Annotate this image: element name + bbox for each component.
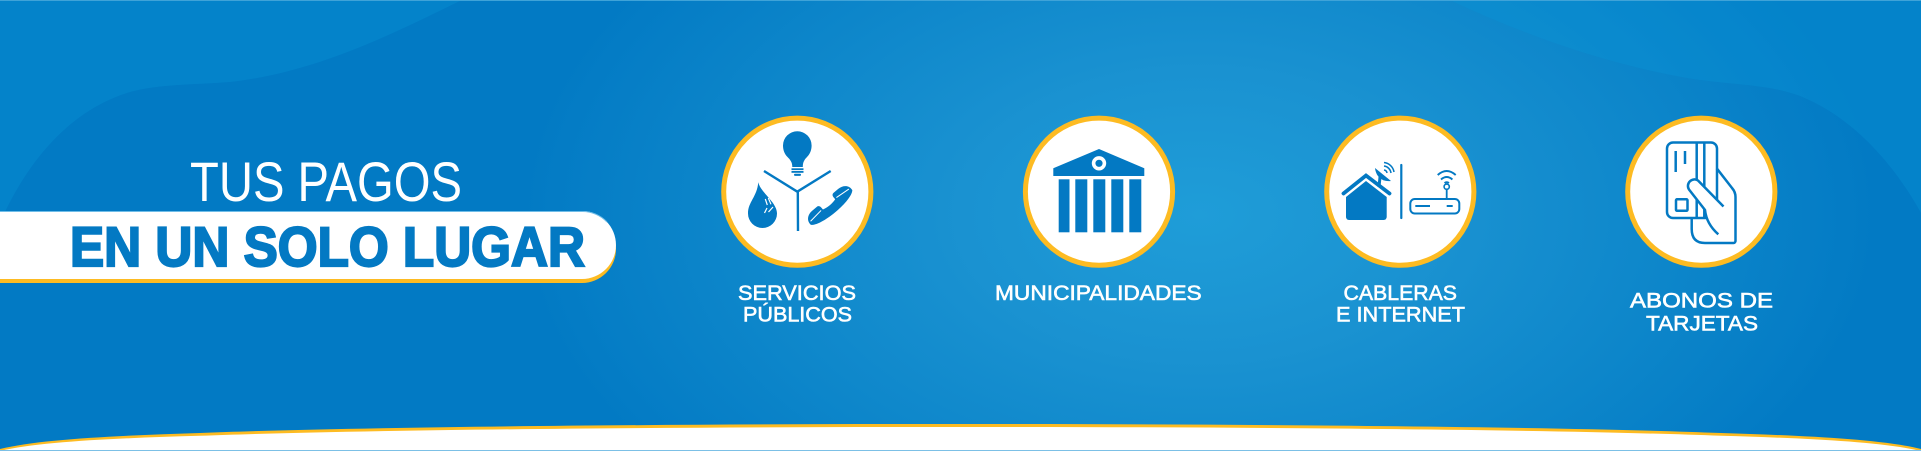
banner: en un solo lugar: EN UN SOLO LUGAR	[70, 215, 585, 278]
item: municipalidades	[995, 118, 1202, 305]
bottom curve	[0, 424, 1921, 451]
label: servicios publicos	[738, 280, 856, 327]
label: abonos de tarjetas	[1630, 287, 1773, 336]
icon: light bulb	[783, 131, 812, 176]
icon: telephone	[804, 182, 856, 229]
label: cableras e internet: E INTERNET	[1336, 302, 1465, 327]
icon: services circle	[724, 118, 871, 265]
icon: cable and internet circle	[1327, 118, 1474, 265]
divider	[1400, 165, 1402, 218]
label: servicios publicos: SERVICIOS	[738, 280, 856, 305]
icon: house with satellite dish	[1344, 162, 1394, 220]
label: servicios publicos: PÚBLICOS	[743, 302, 852, 327]
label: municipalidades: MUNICIPALIDADES	[995, 280, 1202, 305]
heading: tus pagos: TUS PAGOS	[190, 150, 462, 213]
label: abonos de tarjetas: TARJETAS	[1646, 311, 1758, 336]
label: cableras e internet	[1336, 280, 1465, 327]
icon: water drop	[748, 182, 777, 228]
icon: wifi router	[1410, 171, 1459, 214]
item: cableras e internet	[1327, 118, 1474, 327]
icon: municipal building	[1025, 118, 1173, 265]
label: cableras e internet: CABLERAS	[1344, 280, 1457, 305]
item: abonos de tarjetas	[1628, 118, 1775, 336]
icon: hand holding card	[1628, 118, 1775, 265]
icon: dividing lines	[764, 171, 831, 231]
item: servicios publicos	[724, 118, 871, 327]
label: abonos de tarjetas: ABONOS DE	[1630, 287, 1773, 312]
